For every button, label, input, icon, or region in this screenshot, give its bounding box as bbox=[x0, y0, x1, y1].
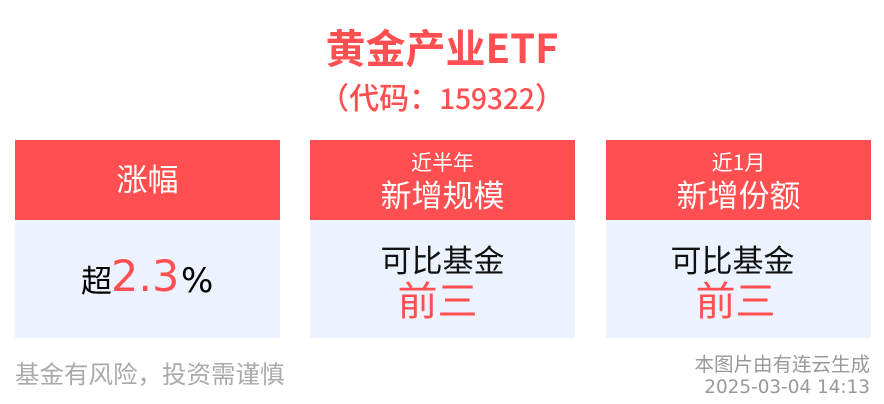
panel header: one-month share growth bbox=[606, 140, 871, 220]
risk disclaimer: 基金有风险，投资需谨慎 bbox=[15, 356, 284, 391]
metric label: 新增规模 bbox=[380, 171, 504, 216]
panel header: half-year scale growth bbox=[310, 140, 575, 220]
label: over: 超 bbox=[81, 256, 112, 301]
source and timestamp bbox=[694, 348, 870, 398]
value: 2.3: 2.3 bbox=[111, 252, 179, 302]
ranking value: 前三 bbox=[696, 269, 776, 327]
panel header: price change bbox=[15, 140, 280, 220]
panel: one-month share growth bbox=[606, 140, 871, 338]
panel: price change bbox=[15, 140, 280, 338]
source and timestamp: 2025-03-04 14:13 bbox=[704, 377, 870, 398]
subtitle: fund code: （代码：159322） bbox=[319, 74, 565, 118]
source and timestamp: 本图片由有连云生成 bbox=[694, 348, 870, 377]
panel header: price change: 涨幅 bbox=[116, 155, 178, 200]
unit: percent: % bbox=[181, 261, 213, 301]
period label: 近半年 bbox=[411, 147, 474, 177]
panel: half-year scale growth bbox=[310, 140, 575, 338]
ranking value: 前三 bbox=[398, 269, 478, 327]
comparison label: 可比基金 bbox=[380, 236, 504, 281]
panel body: share ranking bbox=[606, 220, 871, 338]
metric label: 新增份额 bbox=[676, 171, 800, 216]
panel body: scale ranking bbox=[310, 220, 575, 338]
comparison label: 可比基金 bbox=[670, 236, 794, 281]
panel body: price change value bbox=[15, 220, 280, 338]
period label: 近1月 bbox=[712, 147, 765, 177]
title: 黄金产业ETF bbox=[326, 17, 558, 75]
